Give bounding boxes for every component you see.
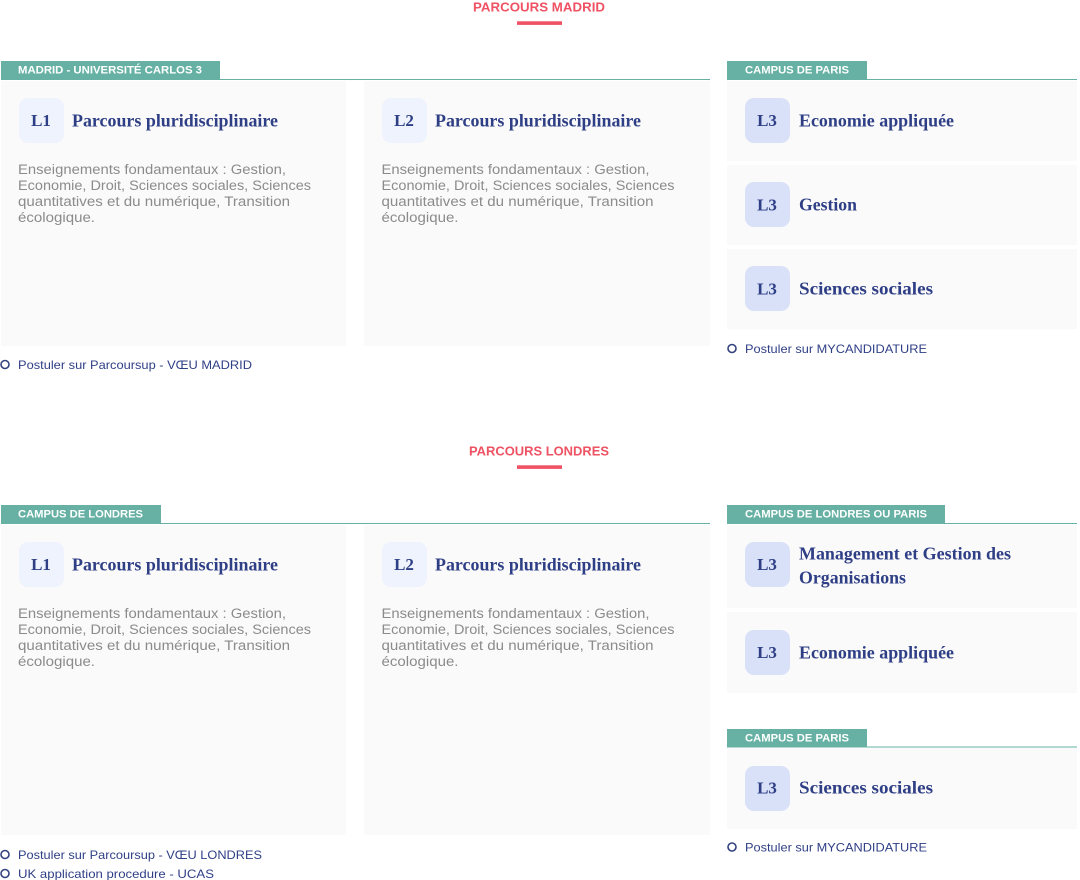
panel: L2 Londres: Economie, Droit, Sciences sociales, Sciences <box>382 622 675 637</box>
panel: L1 Madrid: écologique. <box>18 210 95 225</box>
panel: L3 Economie appliquée: Economie appliquée <box>799 111 954 131</box>
panel: L3 Sciences sociales: L3 <box>757 280 777 298</box>
tag: campus de Londres: CAMPUS DE LONDRES <box>18 508 143 520</box>
panel: L3 Sciences sociales Londres <box>727 748 1077 829</box>
panel: L1 Londres <box>1 525 346 835</box>
panel: L3 Economie appliquée Londres: Economie appliquée <box>799 643 954 663</box>
heading: parcours Madrid <box>473 0 605 25</box>
panel: L1 Madrid: Economie, Droit, Sciences sociales, Sciences <box>18 178 311 193</box>
panel: L3 Management et Gestion des Organisations: L3 <box>757 555 777 574</box>
panel: L3 Management et Gestion des Organisations <box>727 525 1077 608</box>
heading: parcours Londres: PARCOURS LONDRES <box>469 444 609 458</box>
panel: L3 Gestion <box>727 165 1077 245</box>
panel: L1 Madrid: quantitatives et du numérique, Transition <box>18 194 290 209</box>
panel: L1 Londres: L1 <box>31 555 51 574</box>
panel: L3 Management et Gestion des Organisations: Management et Gestion des <box>799 544 1011 564</box>
tag: campus de Londres ou Paris <box>727 505 1077 524</box>
panel: L2 Londres: Parcours pluridisciplinaire <box>435 555 641 575</box>
panel: L2 Madrid: écologique. <box>382 210 458 225</box>
link: Parcoursup vœu Madrid: Postuler sur Parcoursup - VŒU MADRID <box>18 358 252 372</box>
panel: L2 Londres: écologique. <box>382 654 458 669</box>
panel: L1 Londres: quantitatives et du numérique, Transition <box>18 638 290 653</box>
tag: campus de Paris Londres <box>727 729 1077 748</box>
panel: L2 Londres: L2 <box>394 555 414 574</box>
panel: L3 Sciences sociales Londres: L3 <box>757 778 777 798</box>
panel: L1 Londres: écologique. <box>18 654 95 669</box>
panel: L2 Madrid: quantitatives et du numérique, Transition <box>382 194 654 209</box>
panel: L1 Madrid <box>1 81 346 346</box>
tag: campus de Londres ou Paris: CAMPUS DE LONDRES OU PARIS <box>745 508 927 520</box>
tag: Madrid - Université Carlos 3 <box>1 61 710 80</box>
panel: L3 Sciences sociales <box>727 249 1077 329</box>
panel: L2 Londres <box>364 525 710 835</box>
tag: campus de Paris: CAMPUS DE PARIS <box>745 64 849 76</box>
panel: L1 Madrid: Enseignements fondamentaux : Gestion, <box>18 162 286 177</box>
tag: Madrid - Université Carlos 3: MADRID - UNIVERSITÉ CARLOS 3 <box>18 64 202 76</box>
heading: parcours Londres <box>469 444 609 469</box>
panel: L2 Londres: Enseignements fondamentaux : Gestion, <box>382 606 650 621</box>
link: Parcoursup vœu Londres: Postuler sur Parcoursup - VŒU LONDRES <box>18 848 262 862</box>
panel: L3 Economie appliquée <box>727 81 1077 161</box>
section: parcours Madrid <box>1 0 1077 372</box>
link: MyCandidature Paris: Postuler sur MYCANDIDATURE <box>745 342 927 356</box>
panel: L1 Londres: Enseignements fondamentaux : Gestion, <box>18 606 286 621</box>
link: MyCandidature Londres: Postuler sur MYCANDIDATURE <box>745 840 927 854</box>
panel: L3 Management et Gestion des Organisations: Organisations <box>799 568 906 588</box>
panel: L3 Economie appliquée Londres: L3 <box>757 643 777 662</box>
panel: L2 Londres: quantitatives et du numérique, Transition <box>382 638 654 653</box>
panel: L2 Madrid: Parcours pluridisciplinaire <box>435 111 641 131</box>
panel: L3 Economie appliquée Londres <box>727 612 1077 693</box>
section: parcours Londres <box>1 444 1077 880</box>
tag: campus de Paris <box>727 61 1077 80</box>
panel: L3 Gestion: L3 <box>757 196 777 214</box>
panel: L2 Madrid: Enseignements fondamentaux : Gestion, <box>382 162 650 177</box>
panel: L2 Madrid <box>364 81 710 346</box>
panel: L1 Londres: Parcours pluridisciplinaire <box>72 555 278 575</box>
panel: L2 Madrid: Economie, Droit, Sciences sociales, Sciences <box>382 178 675 193</box>
panel: L1 Londres: Economie, Droit, Sciences sociales, Sciences <box>18 622 311 637</box>
panel: L3 Sciences sociales: Sciences sociales <box>799 279 933 299</box>
panel: L3 Sciences sociales Londres: Sciences sociales <box>799 778 933 798</box>
panel: L1 Madrid: Parcours pluridisciplinaire <box>72 111 278 131</box>
tag: campus de Londres <box>1 505 710 524</box>
panel: L2 Madrid: L2 <box>394 111 414 130</box>
panel: L3 Gestion: Gestion <box>799 195 857 215</box>
panel: L3 Economie appliquée: L3 <box>757 111 777 130</box>
tag: campus de Paris Londres: CAMPUS DE PARIS <box>745 732 849 744</box>
panel: L1 Madrid: L1 <box>31 111 51 130</box>
